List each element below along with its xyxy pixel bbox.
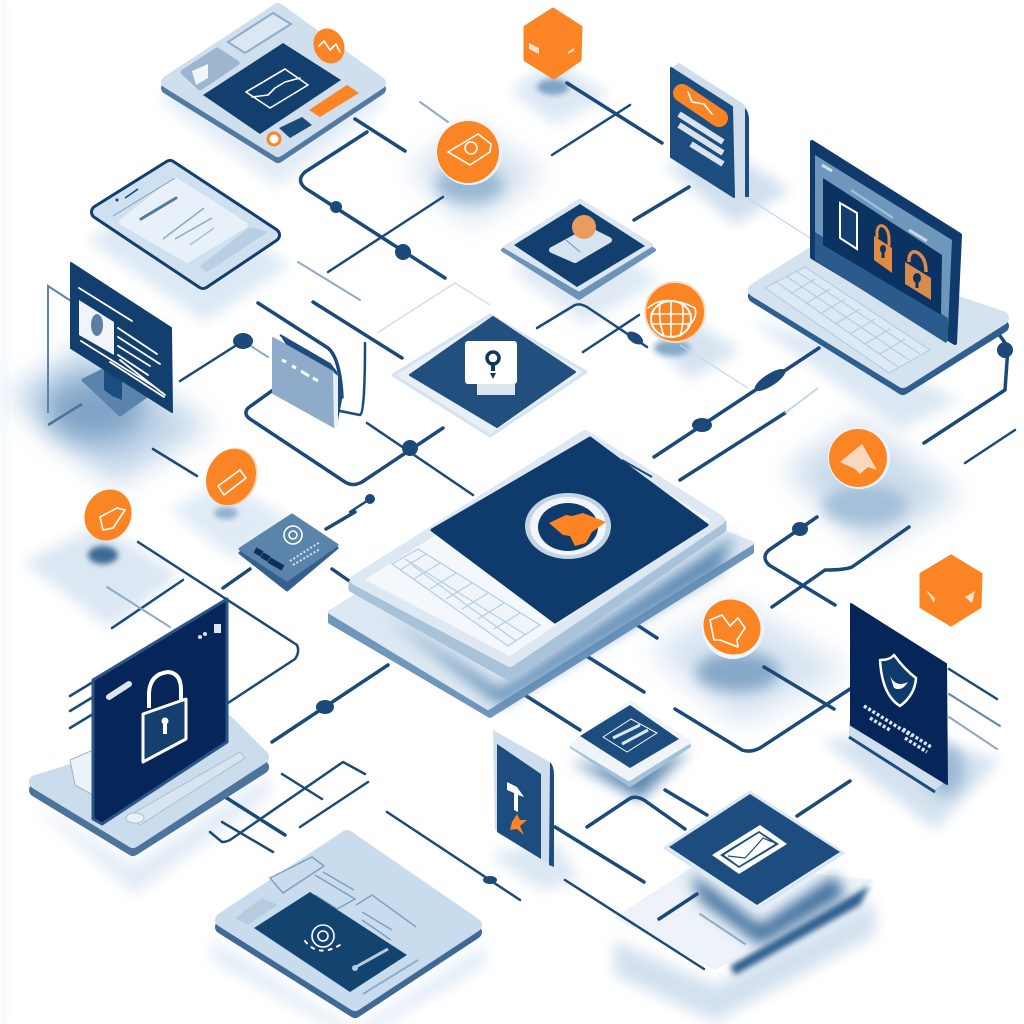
icon: orange map in ring (525, 493, 611, 559)
icon: image frame (712, 825, 787, 874)
icon: orange badge left (76, 482, 140, 548)
icon: shield (880, 655, 916, 706)
icon: orange cube top (525, 9, 581, 78)
icon: orange chart badge (308, 23, 350, 69)
keyboard (392, 549, 540, 646)
panel: small chip with orange ball (503, 200, 654, 298)
panel: document card with orange header (671, 63, 749, 197)
icon: orange cube right (921, 556, 981, 625)
panel: bottom document tablet (222, 837, 475, 1011)
panel: left tablet with text (98, 167, 273, 282)
connector lines (70, 83, 1015, 969)
icon: padlock (905, 252, 931, 300)
icon: orange eye badge (436, 119, 502, 185)
panel: top-left dashboard tablet (167, 9, 380, 157)
icon: orange tile badge (197, 439, 267, 515)
panel: right laptop with padlocks (755, 142, 1002, 388)
panel: bottom-right image chip (665, 792, 843, 909)
panel: small tablet (572, 702, 689, 785)
panel: network router box (273, 335, 342, 427)
panel: shield card (849, 604, 947, 792)
icon: padlock (143, 672, 186, 762)
panel: small spiral chip (240, 515, 337, 590)
icon: padlock (874, 226, 892, 273)
icon: orange badge right (828, 427, 890, 489)
keyboard (765, 267, 930, 373)
icon: orange route badge (693, 589, 771, 665)
panel: phone (493, 730, 554, 867)
panel: central main tablet (330, 435, 752, 716)
panel: left laptop with padlock (36, 599, 262, 849)
panel: central key chip (393, 315, 586, 436)
icon: orange globe (645, 282, 705, 342)
icon: key lock square (465, 341, 517, 395)
panel: left monitor (48, 263, 172, 425)
